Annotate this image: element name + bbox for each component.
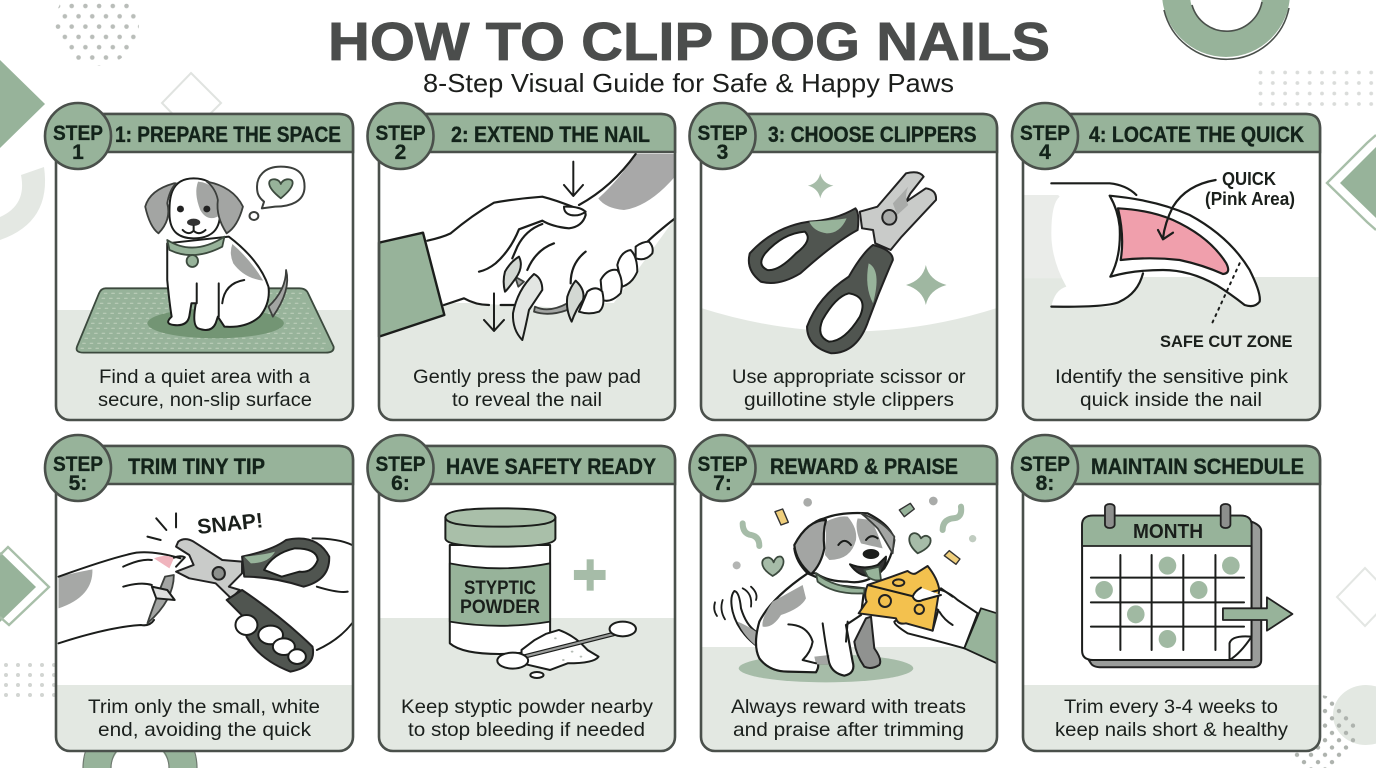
step badge: 3 bbox=[717, 141, 728, 164]
caption bbox=[413, 366, 641, 411]
icon: happy dog with cheese treat and confetti bbox=[714, 497, 997, 682]
step badge: STEP bbox=[1020, 122, 1070, 145]
caption: Identify the sensitive pink bbox=[1055, 366, 1288, 388]
caption: Find a quiet area with a bbox=[99, 366, 310, 388]
panel: step 3 choose clippers bbox=[690, 103, 997, 420]
label: safe cut zone: SAFE CUT ZONE bbox=[1160, 332, 1292, 351]
icon: nail cross-section with quick bbox=[1023, 180, 1260, 325]
icon: calendar with arrow bbox=[1082, 504, 1292, 667]
header bar bbox=[379, 446, 675, 484]
step badge: STEP bbox=[53, 122, 103, 145]
panel: step 8 maintain schedule bbox=[1012, 435, 1320, 751]
step badge: 5: bbox=[69, 472, 87, 495]
caption: to stop bleeding if needed bbox=[408, 719, 645, 741]
caption bbox=[88, 696, 320, 741]
step badge: STEP bbox=[698, 122, 748, 145]
caption: and praise after trimming bbox=[733, 719, 964, 741]
panel: step 4 locate the quick bbox=[1012, 103, 1320, 420]
caption: Keep styptic powder nearby bbox=[401, 696, 653, 718]
heading: TRIM TINY TIP bbox=[128, 454, 265, 479]
caption: end, avoiding the quick bbox=[98, 719, 311, 741]
caption: keep nails short & healthy bbox=[1055, 719, 1288, 741]
icon: hands trimming nail with clippers bbox=[59, 513, 352, 672]
step badge bbox=[45, 435, 111, 501]
label: quick: (Pink Area) bbox=[1205, 189, 1295, 209]
jar label text: POWDER bbox=[460, 597, 540, 618]
step badge bbox=[690, 435, 756, 501]
step badge: STEP bbox=[698, 453, 748, 476]
icon: dog sitting on mat with heart bubble bbox=[77, 167, 334, 353]
header bar bbox=[56, 114, 353, 152]
caption: guillotine style clippers bbox=[744, 389, 954, 411]
step badge bbox=[45, 103, 111, 169]
step badge: STEP bbox=[53, 453, 103, 476]
step badge: STEP bbox=[376, 122, 426, 145]
panel: step 7 reward and praise bbox=[690, 435, 997, 751]
step badge: 6: bbox=[391, 472, 410, 495]
step badge bbox=[1012, 435, 1078, 501]
caption: Gently press the paw pad bbox=[413, 366, 641, 388]
label: snap: SNAP! bbox=[196, 509, 264, 539]
caption: secure, non-slip surface bbox=[98, 389, 312, 411]
jar label text bbox=[460, 578, 540, 618]
caption bbox=[98, 366, 312, 411]
jar label text: STYPTIC bbox=[464, 578, 536, 599]
caption bbox=[731, 696, 966, 741]
label: quick: QUICK bbox=[1222, 169, 1276, 189]
heading: 2: EXTEND THE NAIL bbox=[451, 122, 650, 147]
panel: step 2 extend the nail bbox=[368, 103, 675, 420]
caption: Always reward with treats bbox=[731, 696, 966, 718]
heading: MAINTAIN SCHEDULE bbox=[1091, 454, 1304, 479]
caption bbox=[401, 696, 653, 741]
caption: to reveal the nail bbox=[452, 389, 602, 411]
step badge bbox=[1012, 103, 1078, 169]
step badge: STEP bbox=[376, 453, 426, 476]
step badge bbox=[690, 103, 756, 169]
panel: step 6 have safety ready bbox=[368, 435, 675, 751]
step badge: 8: bbox=[1036, 472, 1054, 495]
heading: 1: PREPARE THE SPACE bbox=[115, 122, 341, 147]
label: quick bbox=[1205, 169, 1295, 209]
step badge bbox=[368, 103, 434, 169]
caption bbox=[1055, 366, 1288, 411]
header bar bbox=[56, 446, 353, 484]
header bar bbox=[1023, 114, 1320, 152]
caption: Trim only the small, white bbox=[88, 696, 320, 718]
icon: styptic powder jar, plus sign and swab bbox=[445, 508, 636, 678]
step badge: 2 bbox=[395, 141, 406, 164]
heading: REWARD & PRAISE bbox=[770, 454, 958, 479]
step badge bbox=[368, 435, 434, 501]
step badge: 7: bbox=[713, 472, 732, 495]
step badge: 1 bbox=[72, 141, 84, 164]
calendar month label: MONTH bbox=[1133, 521, 1203, 543]
caption: quick inside the nail bbox=[1080, 389, 1262, 411]
title: HOW TO CLIP DOG NAILS bbox=[328, 12, 1050, 72]
icon: hand pressing paw pad bbox=[379, 153, 675, 340]
header bar bbox=[379, 114, 675, 152]
step badge: STEP bbox=[1020, 453, 1070, 476]
step badge: 4 bbox=[1039, 141, 1051, 164]
caption: Trim every 3-4 weeks to bbox=[1064, 696, 1278, 718]
heading: 3: CHOOSE CLIPPERS bbox=[768, 122, 976, 147]
subtitle: 8-Step Visual Guide for Safe & Happy Paws bbox=[423, 68, 954, 98]
icon: nail clippers with sparkles bbox=[749, 172, 947, 353]
heading: 4: LOCATE THE QUICK bbox=[1089, 122, 1304, 147]
caption bbox=[732, 366, 966, 411]
caption bbox=[1055, 696, 1288, 741]
header bar bbox=[701, 114, 997, 152]
heading: HAVE SAFETY READY bbox=[446, 454, 656, 479]
header bar bbox=[701, 446, 997, 484]
panel: step 5 trim tiny tip bbox=[45, 435, 353, 751]
header bar bbox=[1023, 446, 1320, 484]
panel: step 1 prepare the space bbox=[45, 103, 353, 420]
caption: Use appropriate scissor or bbox=[732, 366, 966, 388]
